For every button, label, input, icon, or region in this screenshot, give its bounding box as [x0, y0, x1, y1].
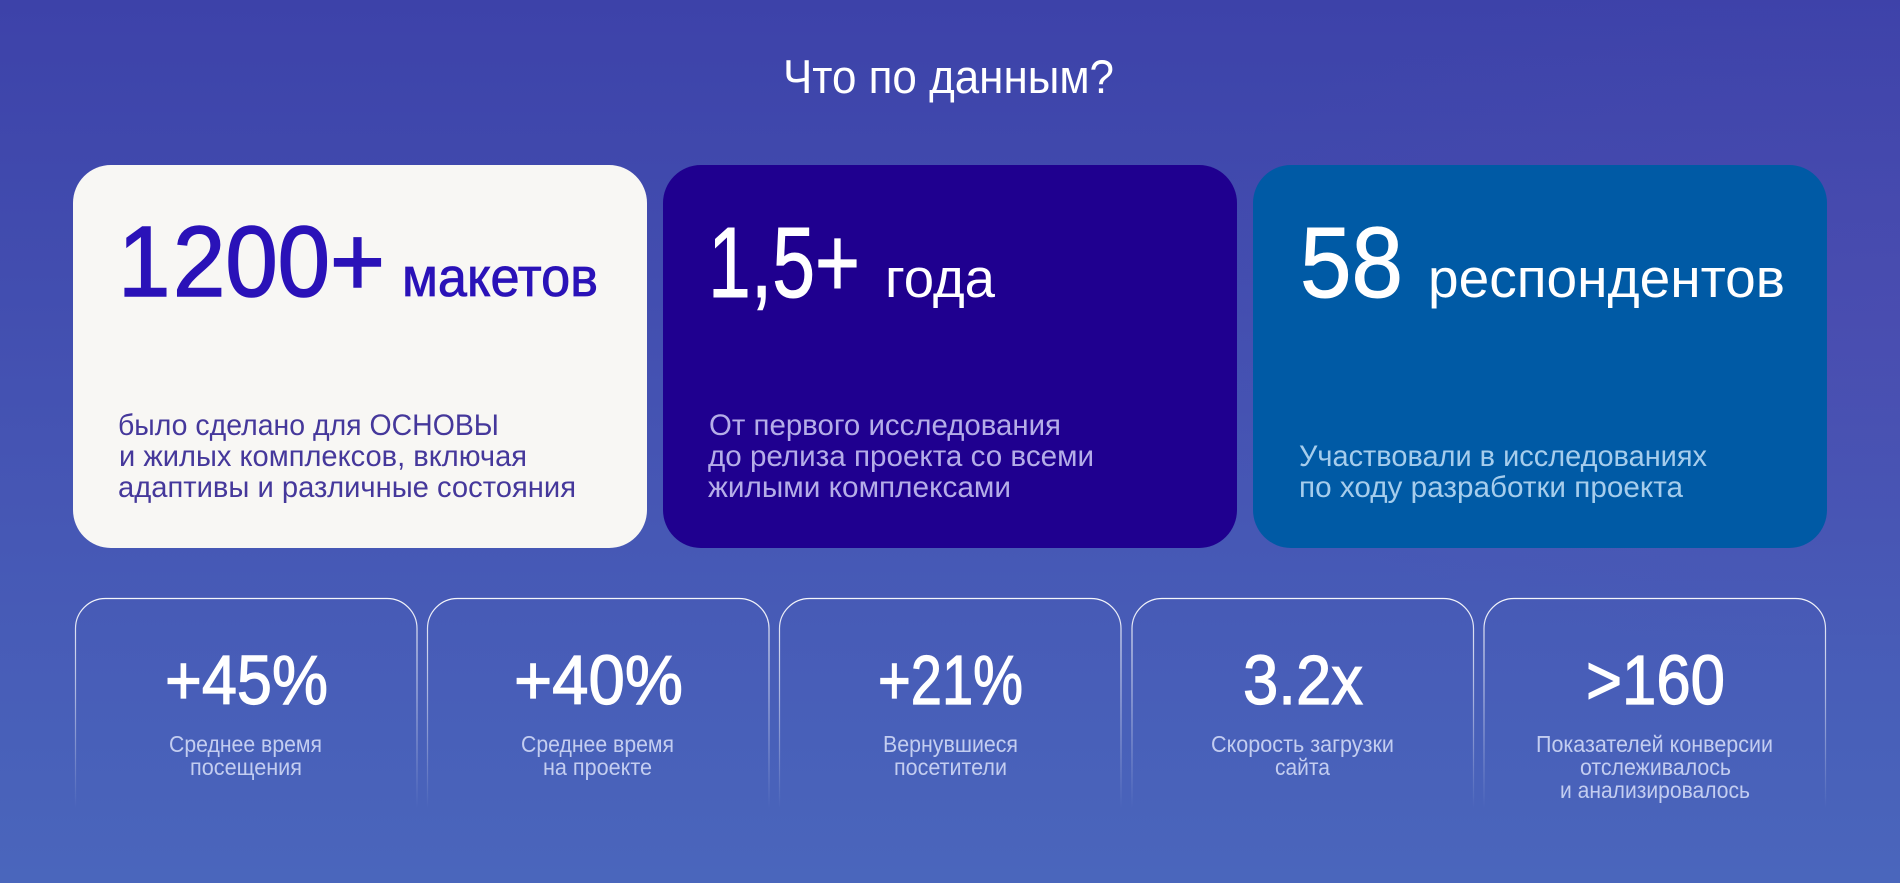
metric card: +21%: [780, 598, 1121, 808]
metric label: Вернувшиеся: [883, 731, 1018, 757]
description: Участвовали в исследованиях: [1299, 440, 1707, 473]
description: [118, 409, 576, 504]
description: до релиза проекта со всеми: [708, 440, 1094, 473]
stat: 1,5+: 1,5+: [708, 207, 860, 319]
panel: 58 respondents: [1253, 165, 1827, 548]
description: адаптивы и различные состояния: [118, 471, 576, 504]
metric label: Среднее время: [169, 731, 322, 757]
metric card: +40%: [428, 598, 769, 808]
description: по ходу разработки проекта: [1299, 471, 1683, 504]
metric value: +21%: [878, 641, 1023, 719]
stat unit: years: года: [885, 247, 995, 309]
metric card: +45%: [76, 598, 417, 808]
metric label: Показателей конверсии: [1536, 731, 1773, 757]
metric label: Среднее время: [521, 731, 674, 757]
metric value: +40%: [514, 641, 683, 719]
stat unit: respondents: респондентов: [1428, 247, 1785, 309]
panel: 1200+ layouts: [73, 165, 647, 548]
metric value: 3.2x: [1243, 641, 1363, 719]
description: От первого исследования: [709, 409, 1061, 442]
metric label: и анализировалось: [1560, 777, 1750, 803]
metric label: [1211, 731, 1394, 780]
metric card: 3.2x: [1132, 598, 1474, 808]
description: было сделано для ОСНОВЫ: [118, 409, 499, 442]
stat unit: layouts: макетов: [402, 246, 598, 308]
stat: 1200+: 1 200+: [118, 206, 385, 318]
metric label: [883, 731, 1018, 780]
metric label: Скорость загрузки: [1211, 731, 1394, 757]
description: [1299, 440, 1707, 504]
panel: 1.5+ years: [663, 165, 1237, 548]
metric value: >160: [1586, 641, 1725, 719]
metric label: отслеживалось: [1580, 754, 1731, 780]
metric card: >160: [1484, 598, 1826, 808]
description: и жилых комплексов, включая: [119, 440, 527, 473]
stat: 58: 58: [1300, 207, 1403, 319]
metric label: посетители: [894, 754, 1007, 780]
metric label: [1536, 731, 1773, 803]
metric label: посещения: [190, 754, 302, 780]
metric label: сайта: [1275, 754, 1330, 780]
description: [708, 409, 1094, 504]
metric label: на проекте: [543, 754, 652, 780]
metric label: [521, 731, 674, 780]
description: жилыми комплексами: [708, 471, 1011, 504]
metric label: [169, 731, 322, 780]
metric value: +45%: [165, 641, 328, 719]
title: Что по данным?: [783, 50, 1114, 103]
